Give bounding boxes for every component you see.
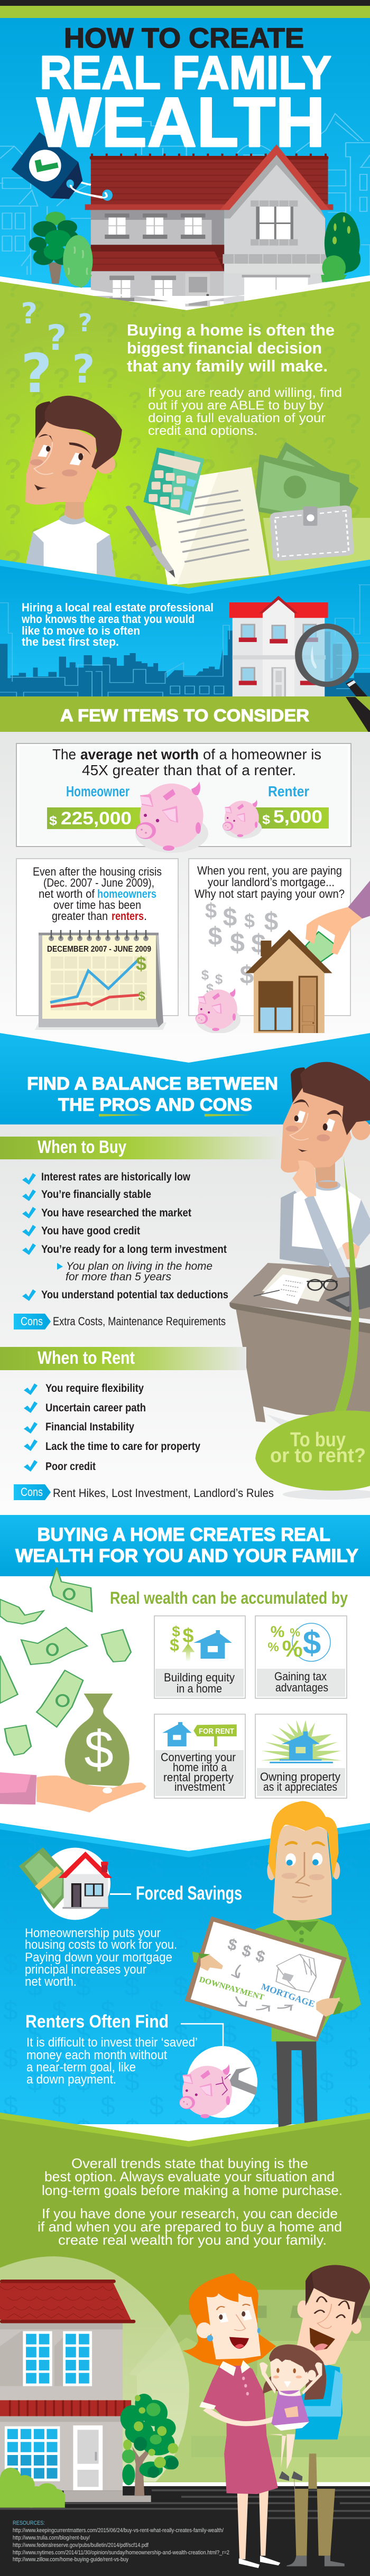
icon: house and money [19,1847,112,1920]
crisis text: . [144,909,147,923]
homeowner value: Homeowner [66,783,130,799]
forced savings text [25,1926,177,1989]
card text [274,1670,328,1694]
panel: forced savings [0,1801,370,2128]
rent cons: Cons [21,1485,43,1499]
bushes [0,2468,65,2508]
falling dollar signs: $ [201,967,209,983]
net worth text: The [52,746,76,762]
buy checklist: You’re financially stable [41,1188,151,1201]
top bars [0,0,370,18]
homeowner value: $ [49,814,58,828]
skyline [0,585,370,696]
title block: WEALTH [36,83,325,162]
board dollars [226,1936,267,1966]
panel: a few items heading [0,696,370,734]
house [85,144,333,301]
falling dollar signs: $ [215,971,223,987]
panel: real wealth heading [0,1515,370,1825]
torso [280,1184,370,1278]
card text: Owning property [260,1770,340,1783]
resource links: http://www.federalreserve.gov/pubs/bulletin/2014/pdf/scf14.pdf [13,2542,149,2549]
bag dollar sign: $ [84,1720,114,1779]
buy cons: Extra Costs, Maintenance Requirements [53,1315,226,1328]
conclusion text: Overall trends state that buying is the [71,2155,308,2171]
big pig [132,775,211,856]
question marks: ? [78,309,92,337]
icon: equity dollars: $ [172,1623,180,1640]
professional text: the best first step. [22,635,119,648]
question marks: ? [21,342,52,405]
card text: as it appreciates [263,1780,337,1793]
icon: for rent sign: FOR RENT [199,1727,234,1736]
homeowner value: 225,000 [61,808,132,829]
heading: FIND A BALANCE BETWEEN [27,1074,278,1094]
card text: Building equity [164,1671,235,1684]
net worth card [16,743,351,856]
professional text: like to move to is often [22,624,140,637]
forced savings text: principal increases your [25,1963,146,1977]
renters heading [25,2012,223,2046]
card text: advantages [275,1681,328,1694]
crisis text: over time has been [53,898,141,912]
crisis text [33,865,162,923]
conclusion text: best option. Always evaluate your situation and [44,2169,335,2184]
ground and road [0,2482,370,2576]
crisis text: Even after the housing crisis [33,865,162,878]
background house outlines [0,114,370,275]
card text [260,1770,340,1793]
board dollars: $ [254,1947,267,1966]
resource links: http://www.trulia.com/blog/rent-buy/ [13,2535,90,2541]
falling dollar signs: $ [251,929,266,959]
renters text: It is difficult to invest their ‘saved’ [26,2035,198,2050]
falling dollar signs: $ [223,904,237,932]
buy checklist: Interest rates are historically low [41,1171,191,1183]
rent text [195,864,345,900]
forced savings text: Paying down your mortgage [25,1950,172,1965]
red roof house with magnifier [229,596,370,713]
rent text: your landlord’s mortgage... [208,876,335,889]
crisis text: greater than [52,909,108,923]
falling dollar signs: $ [205,899,217,923]
speech bubble: to buy or to rent [255,1156,370,1500]
rent checklist [24,1382,200,1473]
renters text: a near-term goal, like [26,2060,136,2075]
rent card [189,859,370,1078]
conclusion text: If you have done your research, you can decide [42,2206,338,2221]
man holding board [185,1801,361,2128]
bubble dome [0,2256,189,2482]
daughter [260,2345,326,2481]
card text [164,1671,235,1695]
homeowner line [50,953,146,1002]
calendar grid [51,956,147,1010]
forced savings text: net worth. [25,1975,77,1989]
icon: equity dollars: $ [182,1625,194,1647]
professional text: who knows the area that you would [21,612,195,626]
panel: resources [13,2520,229,2563]
conclusion text: if and when you are prepared to buy a home and [38,2219,342,2235]
intro paragraph: If you are ready and willing, find [148,386,342,400]
torso [212,1919,361,2041]
card: property appreciates [255,1714,347,1798]
panel: real estate professional [0,560,370,713]
magnifier handle end [346,697,370,734]
panel: items to consider [0,732,370,1078]
calendar chart [35,930,166,1030]
board dollars: $ [240,1942,253,1961]
heading: THE PROS AND CONS [58,1095,252,1115]
net worth text: average net worth [80,746,199,762]
card text: home into a [173,1761,227,1774]
housing crisis card [16,859,178,1030]
rent cons: Rent Hikes, Lost Investment, Landlord’s Rules [53,1486,274,1500]
panel: pros and cons [0,1033,370,1515]
renters heading: Renters Often Find [25,2012,169,2032]
icon: equity dollars: $ [170,1635,179,1654]
card text [161,1751,236,1793]
board label: downpayment: DOWNPAYMENT [198,1975,265,2002]
tree bases [52,275,347,288]
small pig at house [192,984,243,1035]
man with chin in hand [280,1062,370,1278]
icon: percent and dollar: % [267,1640,279,1654]
crisis text: (Dec. 2007 - June 2009), [43,876,154,889]
renters text [26,2035,198,2087]
icon: percent and dollar: % [282,1636,303,1662]
intro headline: that any family will make. [127,357,328,375]
buy checklist: You have researched the market [41,1207,191,1219]
renter value: 5,000 [273,807,322,827]
renters text: money each month without [26,2048,167,2062]
calendar title: DECEMBER 2007 - JUNE 2009 [47,945,151,954]
brown house [245,929,332,1078]
card: tax advantages [255,1616,347,1698]
falling dollar signs: $ [208,923,223,951]
forced savings text: Homeownership puts your [25,1926,161,1940]
panel: real wealth accumulation [0,1568,348,1812]
net worth text: 45X greater than that of a renter. [82,762,296,778]
board dollars: $ [226,1936,239,1955]
net worth text: of a homeowner is [203,746,321,762]
resource links: http://www.nytimes.com/2014/11/30/opinion/sunday/homeownership-and-wealth-creation.html?_r=2 [13,2550,229,2556]
intro headline: Buying a home is often the [127,321,335,339]
renter line: $ [138,989,145,1003]
rent text: Why not start paying your own? [195,887,345,900]
calculator and document [143,448,269,585]
rent text: When you rent, you are paying [197,864,342,877]
icon: percent and dollar [267,1623,330,1662]
panel: hero [0,18,370,306]
rent checklist: Financial Instability [45,1421,134,1433]
legs [276,2040,317,2128]
falling dollar signs: $ [230,928,245,957]
buy checklist: You plan on living in the home [66,1260,212,1272]
intro headline: biggest financial decision [127,339,322,357]
when to rent band [0,1347,246,1370]
father [286,2265,370,2566]
board label: mortgage: MORTGAGE [260,1982,316,2009]
buy checklist: You understand potential tax deductions [41,1289,228,1301]
heading: WEALTH FOR YOU AND YOUR FAMILY [15,1546,358,1566]
buy checklist [22,1171,228,1301]
speech bubble: to buy or to rent: or to rent? [270,1445,366,1467]
money bag in hand [0,1694,146,1812]
hands [200,1955,223,1971]
head [267,1861,275,1880]
tree [121,2394,179,2496]
icon: for rent sign [162,1722,237,1746]
heading: A FEW ITEMS TO CONSIDER [60,706,309,725]
icon: house with rays [261,1720,341,1763]
title block: HOW TO CREATE [64,23,304,54]
trees [29,212,360,286]
heading [27,1074,278,1117]
question marks: ? [47,318,67,358]
icon: piggy and hammer [176,2046,257,2123]
title block: REAL FAMILY [40,46,331,99]
conclusion text: create real wealth for you and your family. [58,2232,327,2248]
rent checklist: You require flexibility [45,1382,144,1394]
question marks: ? [72,347,95,392]
calendar rings [49,930,149,941]
rent cons [14,1484,274,1500]
crisis text: renters [112,909,144,923]
card text: Converting your [161,1751,236,1764]
small pig [220,796,263,840]
rent checklist: Poor credit [45,1461,96,1473]
heading [15,1524,358,1566]
desk [229,1263,370,1427]
rent checklist: Lack the time to care for property [45,1440,200,1453]
title block [36,23,331,162]
panel: green intro [0,275,370,592]
card text: in a home [177,1682,222,1695]
icon: equity dollars [170,1623,194,1654]
icon: percent and dollar: $ [303,1625,321,1661]
house lower floor [109,273,325,306]
icon: percent and dollar: % [290,1626,300,1639]
neighbourhood background [128,2290,370,2487]
renter value [254,783,329,829]
intro paragraph: credit and options. [148,424,257,438]
forced savings text: housing costs to work for you. [25,1938,177,1952]
professional text [21,601,214,648]
resources label: RESOURCES: [13,2520,45,2526]
mother [183,2273,283,2568]
family [183,2265,370,2568]
resource links [13,2527,229,2563]
head [281,1062,370,1197]
card: building equity [154,1616,245,1698]
renters text: a down payment. [26,2072,116,2087]
buy checklist: You’re ready for a long term investment [41,1243,227,1256]
pen [126,506,175,578]
falling dollar signs: $ [264,908,279,936]
panel: conclusion [0,2113,370,2576]
falling dollar signs: $ [244,910,255,932]
card text: investment [174,1780,225,1793]
buy checklist: You have good credit [41,1225,140,1237]
buy cons: Cons [21,1315,43,1328]
intro paragraph [148,386,342,438]
board sketch [232,1965,291,2012]
homeowner line: $ [136,953,146,974]
intro paragraph: doing a full evaluation of your [148,411,326,425]
heading: BUYING A HOME CREATES REAL [37,1524,330,1545]
card text: rental property [163,1771,234,1784]
when to buy band [0,1137,283,1159]
resource links: http://www.keepingcurrentmatters.com/2015/06/24/buy-vs-rent-what-really-creates-family-wealth/ [13,2527,224,2534]
renter value: Renter [268,783,309,799]
forced savings heading [110,1882,242,1904]
intro paragraph: out if you are ABLE to buy by [148,398,323,413]
wallet [270,506,354,561]
falling dollar signs [201,899,279,997]
falling dollar signs: $ [206,981,214,997]
speech bubble: to buy or to rent: To buy [290,1429,346,1451]
resource links: http://www.zillow.com/home-buying-guide/rent-vs-buy [13,2556,128,2563]
renter line [51,989,145,1007]
icon: percent and dollar: % [271,1623,284,1641]
buy checklist: for more than 5 years [66,1271,171,1283]
card text: Gaining tax [274,1670,327,1683]
renter value: $ [262,813,271,827]
crisis text: net worth of [39,887,95,900]
icon: equity house [182,1630,232,1662]
rent checklist: Uncertain career path [45,1402,146,1414]
forced savings heading: Forced Savings [136,1882,242,1904]
board [185,1917,347,2041]
question marks: ? [21,297,38,330]
falling dollar signs: $ [240,961,254,989]
man thinking [25,396,122,577]
conclusion text: long-term goals before making a home purchase. [42,2182,343,2198]
card: rental property [154,1714,245,1798]
buy cons [14,1314,226,1329]
homeowner value [47,783,142,829]
when to buy band: When to Buy [38,1137,126,1157]
professional text: Hiring a local real estate professional [22,601,214,614]
question marks [21,297,95,405]
when to rent band: When to Rent [38,1348,135,1368]
hand with bill [306,881,370,965]
intro headline [127,321,335,375]
net worth text [52,746,321,778]
tag with checkmark [11,132,113,201]
falling money [0,1568,131,1755]
crisis text: homeowners [97,887,156,900]
red roof house [0,2280,151,2502]
conclusion text [38,2155,343,2248]
money and wallet [254,442,370,578]
